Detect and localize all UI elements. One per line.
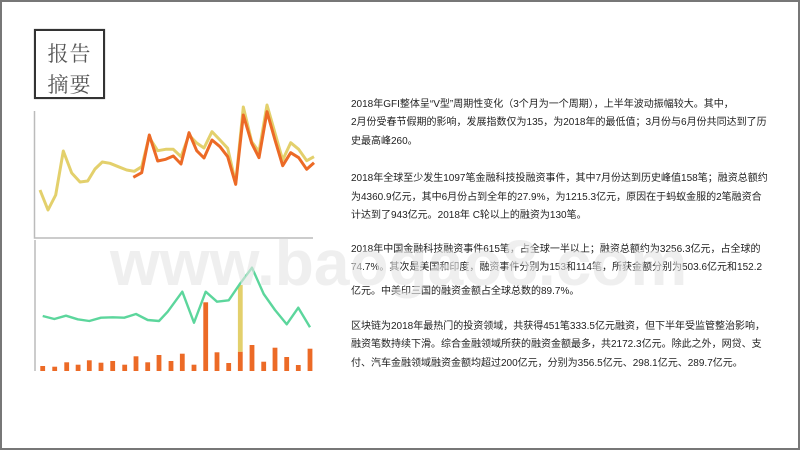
body text: 史最高峰260。: [351, 136, 418, 147]
paragraph: blockchain: [351, 320, 765, 369]
yellow line: [40, 105, 314, 210]
bars: [40, 302, 312, 371]
body text: 亿元。中美印三国的融资金额占全球总数的89.7%。: [351, 286, 579, 297]
body text: 74.7%。其次是美国和印度，融资事件分别为153和114笔，所获金额分别为503.6亿元和152.2: [351, 262, 762, 273]
body text: 融资笔数持续下滑。综合金融领域所获的融资金额最多，共2172.3亿元。除此之外，网贷、支: [351, 339, 762, 350]
body text: 2018年GFI整体呈“V型”周期性变化（3个月为一个周期），上半年波动振幅较大。其中，: [351, 99, 734, 110]
paragraph: China funding: [351, 243, 762, 297]
body text: 计达到了943亿元。2018年 C轮以上的融资为130笔。: [351, 210, 587, 221]
paragraph: global funding: [351, 172, 768, 221]
line chart: index trend: [34, 105, 314, 238]
orange line: [133, 112, 314, 184]
body text: 付、汽车金融领域融资金额均超过200亿元，分别为356.5亿元、298.1亿元、289.7亿元。: [351, 358, 743, 369]
body text: 2018年中国金融科技融资事件615笔，占全球一半以上；融资总额约为3256.3亿元，占全球的: [351, 244, 761, 255]
body text: 为4360.9亿元，其中6月份占到全年的27.9%，为1215.3亿元，原因在于蚂蚁金服的2笔融资合: [351, 192, 762, 203]
green line: [43, 268, 310, 327]
body text: [351, 98, 768, 369]
body text: 2018年全球至少发生1097笔金融科技投融资事件，其中7月份达到历史峰值158笔；融资总额约: [351, 173, 768, 184]
highlighted yellow bar: [238, 285, 243, 352]
paragraph: GFI index: [351, 98, 767, 147]
title box: 摘要: [48, 73, 92, 97]
body text: 2月份受春节假期的影响，发展指数仅为135，为2018年的最低值；3月份与6月份共同达到了历: [351, 117, 767, 128]
title box: [34, 29, 105, 99]
bar and line chart: funding events: [35, 240, 312, 371]
body text: 区块链为2018年最热门的投资领域，共获得451笔333.5亿元融资，但下半年受监管整治影响，: [351, 321, 765, 332]
watermark: www.baogao8.com: [110, 227, 687, 299]
title box: 报告: [48, 42, 92, 66]
